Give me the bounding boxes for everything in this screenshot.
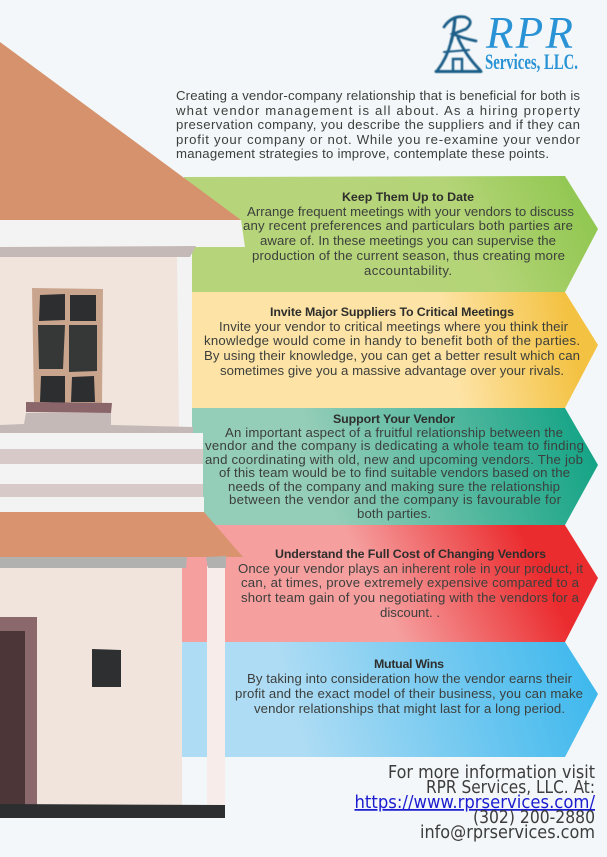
panel: keep them up to date arrow	[184, 176, 598, 292]
text: understand the full cost: short team gain of you negotiating with the vendors for a	[241, 590, 580, 605]
logo: RPR: RPR	[485, 8, 573, 58]
foundation	[0, 804, 225, 818]
roof eave	[0, 220, 245, 247]
panel: invite major suppliers arrow	[192, 292, 598, 408]
intro text	[175, 88, 581, 161]
text: invite major suppliers: By using their knowledge, you can get a better result which can	[204, 348, 580, 363]
text: invite major suppliers: sometimes give you a massive advantage over your rivals.	[220, 363, 564, 378]
text: support your vendor: vendor and the company is dedicating a whole team to finding	[205, 438, 584, 453]
text: invite major suppliers: knowledge would come in handy to benefit both of the parties.	[204, 333, 580, 348]
pillar cap shadow	[206, 556, 226, 568]
text: invite major suppliers: Invite Major Suppliers To Critical Meetings	[270, 305, 514, 319]
text: understand the full cost: discount. .	[380, 605, 440, 620]
footer contact block: (302) 200-2880	[473, 808, 595, 828]
text: support your vendor	[205, 412, 584, 521]
text: keep them up to date: aware of. In these meetings you can supervise the	[260, 233, 556, 248]
text: support your vendor: needs of the company and making sure the relationship	[228, 479, 560, 494]
intro text: what vendor management is all about. As a hiring property	[175, 103, 580, 118]
lower wall	[0, 566, 182, 805]
text: support your vendor: An important aspect of a fruitful relationship between the	[225, 425, 563, 440]
text: support your vendor: and coordinating with old, new and upcoming vendors. The job	[205, 452, 583, 467]
text: mutual wins: Mutual Wins	[374, 657, 444, 671]
illustration: house	[0, 42, 245, 818]
text: keep them up to date	[243, 190, 574, 278]
intro text: preservation company, you describe the suppliers and if they can	[176, 117, 580, 132]
small window	[92, 649, 121, 687]
text: invite major suppliers: Invite your vendor to critical meetings where you think their	[219, 319, 569, 334]
text: mutual wins: By taking into consideration how the vendor earns their	[247, 671, 573, 686]
text: understand the full cost: Once your vendor plays an inherent role in your product, it	[238, 561, 583, 576]
text: keep them up to date: Arrange frequent meetings with your vendors to discuss	[247, 204, 574, 219]
footer contact block: info@rprservices.com	[420, 823, 595, 843]
text: support your vendor: of this team would be to find suitable vendors based on the	[219, 465, 570, 480]
window sill	[26, 402, 112, 413]
text: mutual wins: vendor relationships that might last for a long period.	[254, 701, 565, 716]
lower pillar	[207, 566, 225, 806]
text: understand the full cost	[238, 547, 583, 620]
porch bands	[0, 433, 204, 512]
footer contact block: https://www.rprservices.com/	[354, 793, 595, 813]
footer contact block	[354, 763, 595, 843]
intro text: management strategies to improve, contemplate these points.	[176, 146, 549, 161]
text: mutual wins: profit and the exact model of their business, you can make	[235, 686, 583, 701]
upper wall	[0, 257, 179, 427]
intro text: profit your company or not. While you re-examine your vendor	[176, 132, 581, 147]
upper pillar	[177, 257, 192, 428]
panel: mutual wins arrow	[182, 642, 598, 757]
text: understand the full cost: Understand the Full Cost of Changing Vendors	[275, 547, 546, 561]
house upper roof	[0, 42, 241, 220]
door frame	[0, 617, 37, 805]
lower roof shadow	[0, 557, 187, 568]
text: keep them up to date: accountability.	[364, 263, 452, 278]
panel: support your vendor arrow	[192, 408, 598, 525]
text: mutual wins	[235, 657, 583, 716]
lower roof	[0, 512, 243, 557]
text: keep them up to date: any recent preferences and particulars both parties are	[243, 218, 573, 233]
intro text: Creating a vendor-company relationship that is beneficial for both is	[176, 88, 580, 103]
text: keep them up to date: production of the current season, thus creating more	[252, 248, 565, 263]
upper window	[32, 288, 103, 403]
panel: understand the full cost arrow	[182, 525, 598, 642]
text: understand the full cost: can, at times, prove extremely expensive compared to a	[241, 575, 580, 590]
logo	[436, 8, 578, 74]
door	[0, 631, 25, 805]
text: support your vendor: Support Your Vendor	[333, 412, 455, 426]
text: invite major suppliers	[204, 305, 580, 378]
eave shadow	[0, 246, 196, 257]
sill base and ledge	[0, 413, 193, 433]
text: keep them up to date: Keep Them Up to Date	[342, 190, 474, 204]
text: support your vendor: between the vendor and the company is favourable for	[229, 492, 562, 507]
logo mark: house with R	[436, 17, 481, 72]
text: support your vendor: both parties.	[357, 506, 431, 521]
